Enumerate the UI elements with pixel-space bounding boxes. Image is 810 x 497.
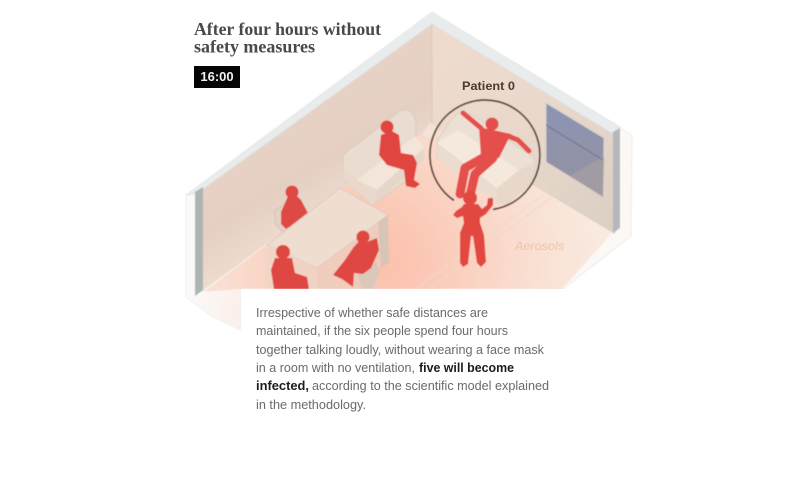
chair: back <box>275 203 306 232</box>
description text: in the methodology. <box>256 398 366 412</box>
label: Patient 0: Patient 0 <box>462 79 515 93</box>
text box background <box>241 289 810 497</box>
sofa: middle <box>343 110 424 205</box>
left wall end <box>195 187 203 296</box>
person: seated on sofa <box>379 120 420 188</box>
person: front right <box>333 230 379 287</box>
person: back at table <box>281 186 308 229</box>
room illustration <box>186 12 632 330</box>
title: safety measures <box>194 36 315 56</box>
description text: five will become <box>419 361 514 375</box>
description text: according to the scientific model explained <box>312 379 549 393</box>
time badge <box>194 66 240 88</box>
description text: maintained, if the six people spend four hours <box>256 324 508 338</box>
chair: front right <box>357 262 380 289</box>
description text: infected, <box>256 379 309 393</box>
right wall end <box>613 128 620 233</box>
floor lines <box>417 193 557 288</box>
sofa: patient <box>437 112 535 205</box>
table <box>265 188 389 289</box>
time badge: 16:00 <box>200 69 234 84</box>
title: After four hours without <box>194 19 381 39</box>
description text: together talking loudly, without wearing a face mask <box>256 343 545 357</box>
description text <box>256 306 549 412</box>
person: patient 0 <box>460 113 529 196</box>
right wall <box>432 24 615 234</box>
title <box>194 19 381 56</box>
glass outline of room <box>186 128 632 330</box>
wall top edge <box>186 12 620 195</box>
patient highlight circle <box>430 100 540 209</box>
floor <box>203 122 613 292</box>
person: front left <box>271 245 309 289</box>
sofa: corner piece <box>420 122 440 140</box>
description text: Irrespective of whether safe distances are <box>256 306 488 320</box>
window <box>546 103 604 197</box>
label: Aerosols: Aerosols <box>514 239 564 253</box>
person: standing <box>453 191 493 267</box>
description text: in a room with no ventilation, <box>256 361 415 375</box>
left wall <box>195 24 432 296</box>
wall corner line <box>431 24 433 125</box>
